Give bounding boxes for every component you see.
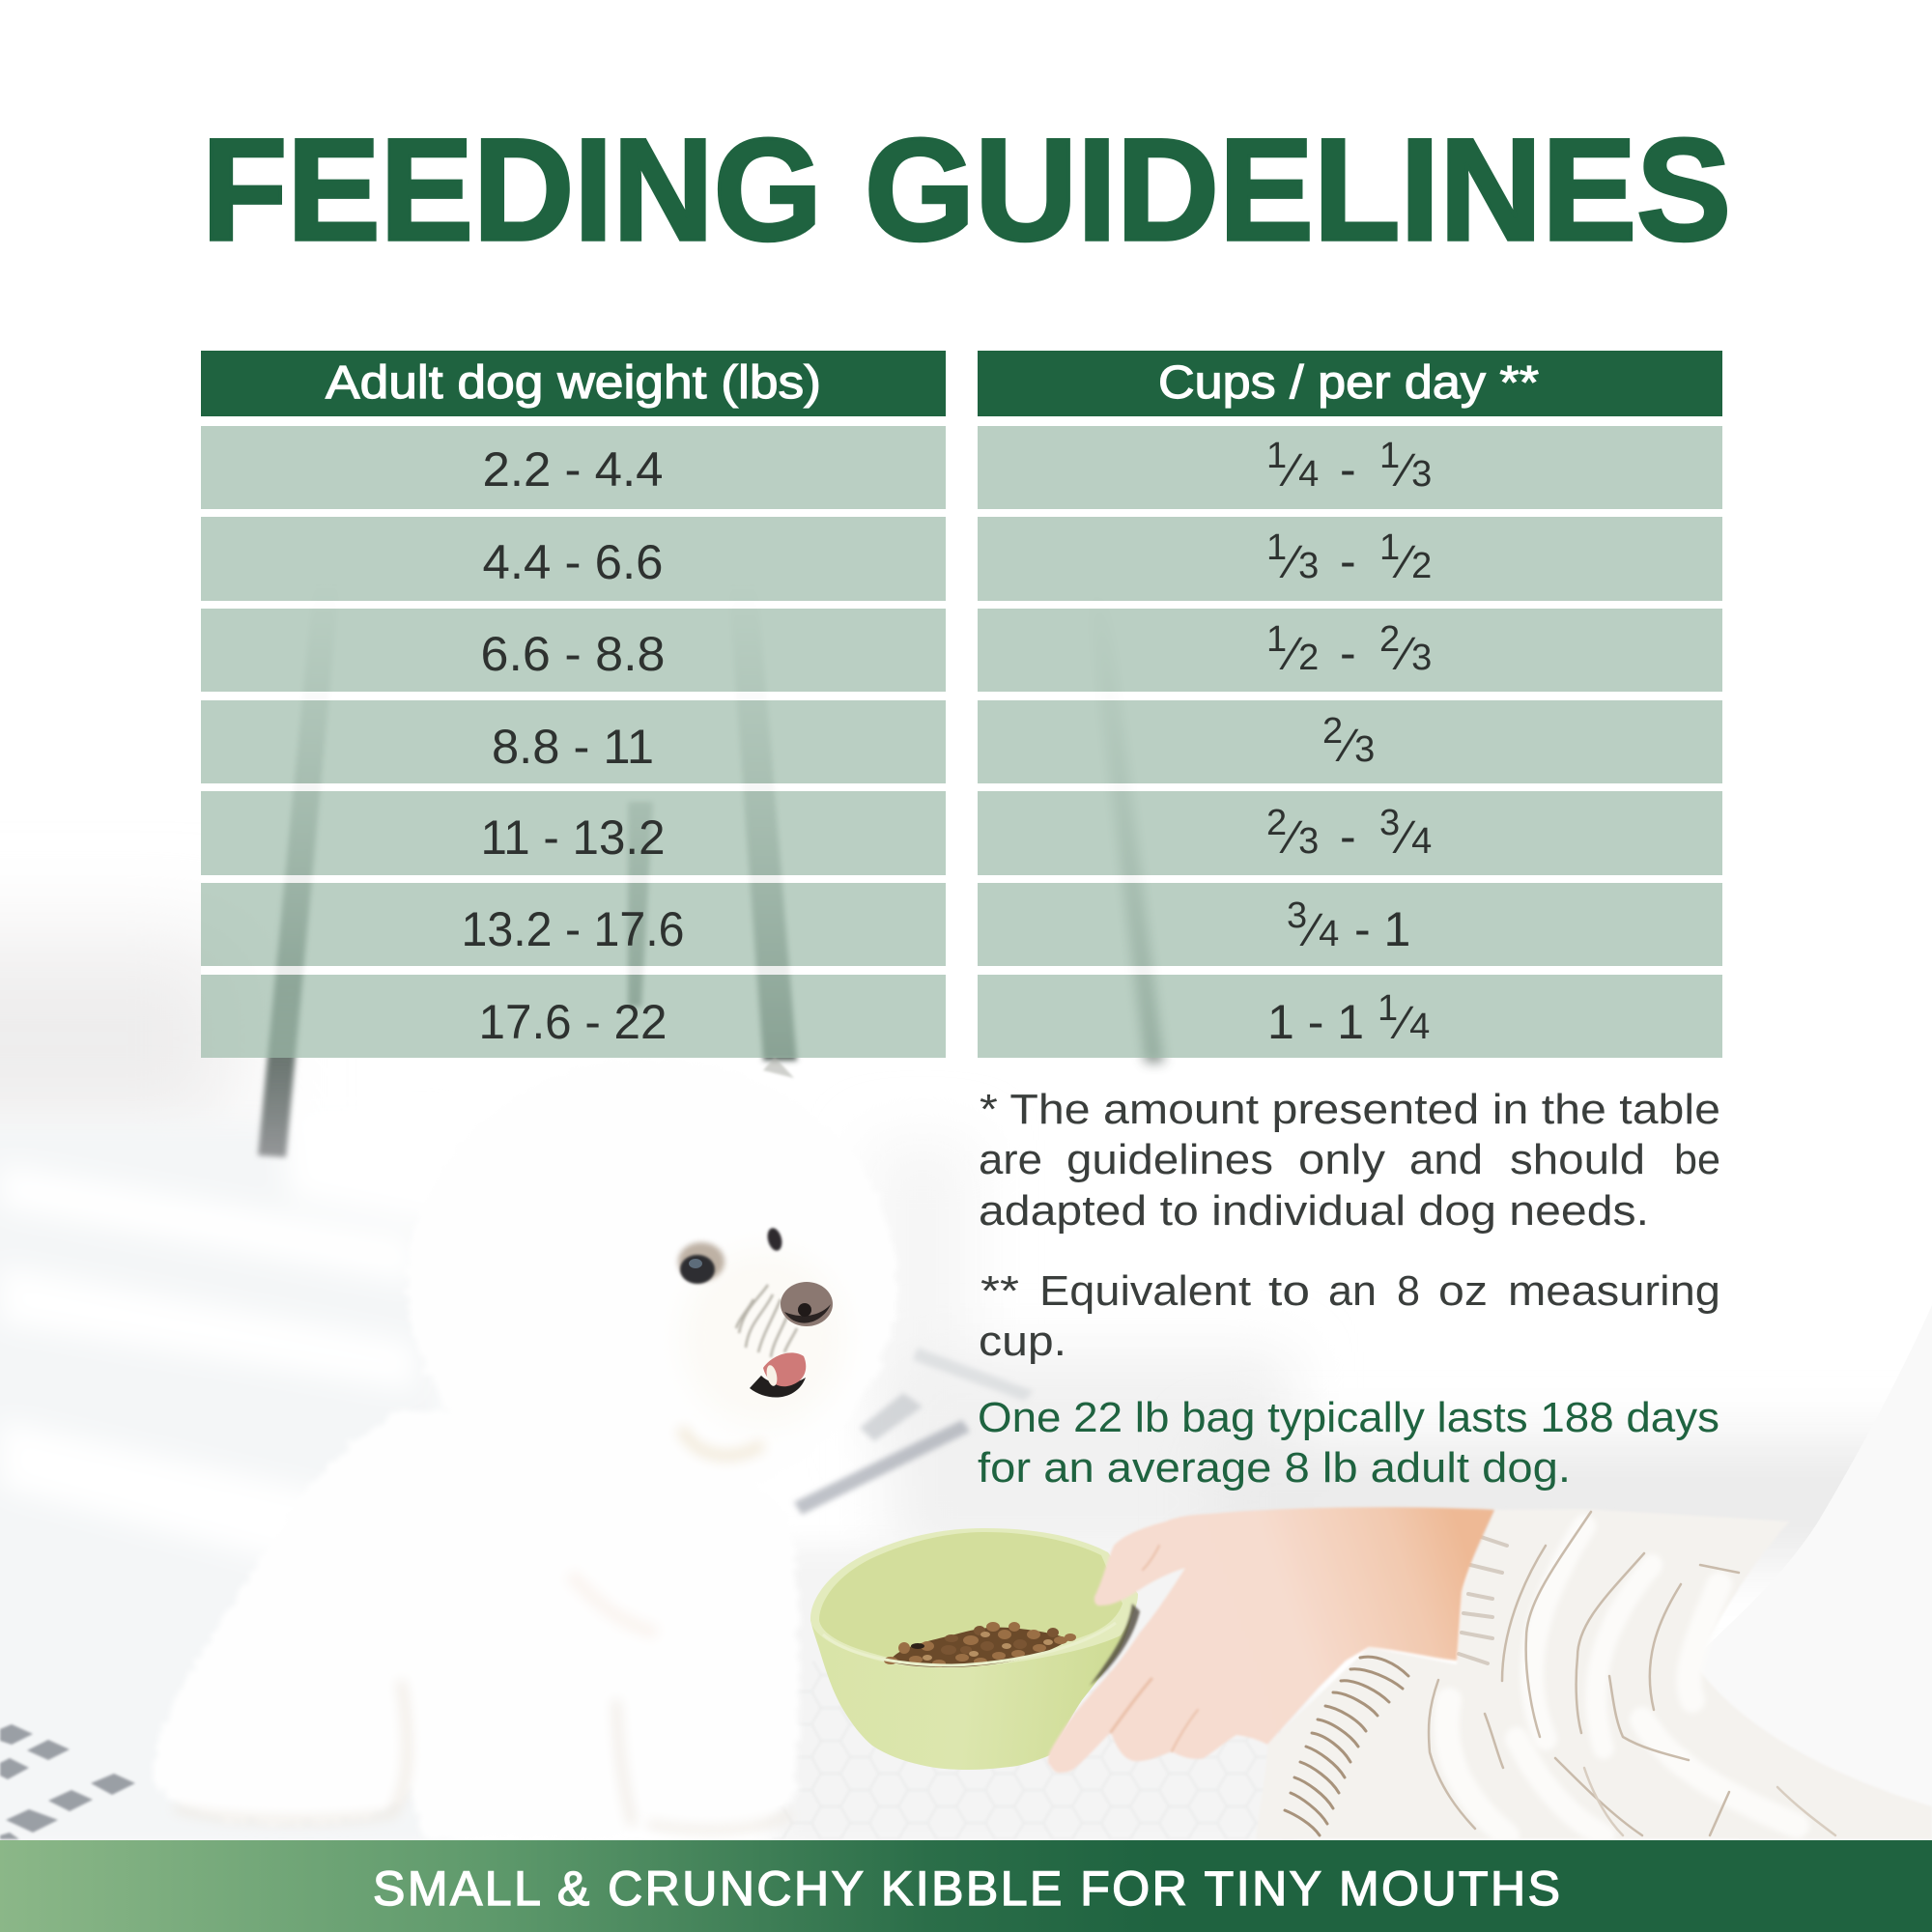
row 4: two thirds: 3: [1354, 729, 1375, 770]
weight values: 11 - 13.2: [481, 810, 665, 865]
row 5: two thirds to three quarters: 3: [1298, 821, 1319, 862]
sleeve body: [1256, 1509, 1932, 1839]
dog mouth: [750, 1352, 806, 1398]
cups rows: [978, 426, 1722, 1058]
header: adult dog weight: [201, 351, 946, 416]
sleeve pleat lines: [1429, 1512, 1835, 1835]
weight values: 17.6 - 22: [479, 995, 667, 1049]
footnote: measuring cup: Equivalent: [1039, 1267, 1251, 1315]
callout: bag duration: [978, 1394, 1719, 1492]
footnote: measuring cup: to: [1268, 1267, 1310, 1315]
cups values: [1266, 436, 1432, 1049]
dog nose: [781, 1282, 833, 1326]
row 1: one quarter to one third: ⁄: [1279, 445, 1303, 497]
cuff ruffle: [1459, 1536, 1507, 1663]
callout: bag duration: for an average 8 lb adult dog.: [978, 1444, 1571, 1492]
bowl interior: [819, 1532, 1122, 1662]
row 1: one quarter to one third: -: [1340, 442, 1356, 497]
row 5: two thirds to three quarters: 2: [1266, 803, 1287, 843]
dog: bichon frise: [151, 1057, 896, 1839]
bowl rim: [810, 1528, 1138, 1668]
footnote: measuring cup: **: [980, 1267, 1019, 1315]
dog ear tuft: [763, 1057, 794, 1078]
row 3: one half to two thirds: 3: [1411, 638, 1432, 678]
row 2: one third to one half: ⁄: [1279, 537, 1303, 588]
chair legs behind the table: [258, 541, 1164, 1157]
title: [202, 108, 1731, 270]
sleeve fold highlights: [1447, 1526, 1797, 1835]
row 5: two thirds to three quarters: ⁄: [1392, 812, 1416, 864]
footnote: guideline amounts: should: [1510, 1136, 1645, 1183]
bowl front lip highlight: [823, 1623, 1116, 1665]
footnote: measuring cup: an: [1328, 1267, 1377, 1315]
bowl outer body: [810, 1536, 1138, 1770]
row 5: two thirds to three quarters: 4: [1411, 821, 1432, 862]
table: cups per day: [978, 351, 1722, 1058]
row 7: one to one and a quarter: ⁄: [1390, 998, 1414, 1049]
row 2: one third to one half: -: [1340, 534, 1356, 588]
floor tiles lower left: [0, 1724, 135, 1839]
row 1: one quarter to one third: 1: [1379, 436, 1400, 476]
row 2: one third to one half: 2: [1411, 546, 1432, 586]
row 3: one half to two thirds: ⁄: [1392, 629, 1416, 680]
row 4: two thirds: 2: [1322, 711, 1343, 752]
footnote: guideline amounts: adapted to individual dog needs.: [979, 1187, 1649, 1235]
bottom banner: [0, 1840, 1932, 1932]
row 3: one half to two thirds: -: [1340, 626, 1356, 680]
footnote: guideline amounts: are: [979, 1136, 1042, 1183]
header: cups per day: Cups / per day **: [1158, 357, 1539, 409]
footnote: measuring cup: [979, 1267, 1720, 1365]
dog body and legs: [151, 1409, 800, 1839]
row 5: two thirds to three quarters: -: [1340, 810, 1356, 864]
row 7: one to one and a quarter: 4: [1409, 1007, 1430, 1047]
footnote: guideline amounts: be: [1674, 1136, 1720, 1183]
torso: [1692, 1305, 1932, 1839]
weight values: 2.2 - 4.4: [483, 442, 663, 497]
food bowl: [810, 1528, 1140, 1770]
footnote: measuring cup: oz: [1438, 1267, 1488, 1315]
footnote: guideline amounts: * The amount presented in the table: [980, 1086, 1720, 1133]
footnote: guideline amounts: only: [1298, 1136, 1385, 1183]
row 1: one quarter to one third: 1: [1266, 436, 1287, 476]
callout: bag duration: One 22 lb bag typically lasts 188 days: [978, 1394, 1719, 1441]
row 1: one quarter to one third: 4: [1298, 454, 1319, 495]
row 6: three quarters to one: 3: [1287, 895, 1307, 936]
header: cups per day: [978, 351, 1722, 416]
dog right eye: [765, 1227, 784, 1252]
row 3: one half to two thirds: ⁄: [1279, 629, 1303, 680]
weight values: 8.8 - 11: [492, 720, 654, 774]
title: GUIDELINES: [865, 108, 1731, 270]
row 2: one third to one half: 1: [1266, 527, 1287, 568]
weight values: 13.2 - 17.6: [462, 902, 684, 956]
floor light stripes: [0, 1082, 618, 1584]
footnote: measuring cup: 8: [1397, 1267, 1420, 1315]
dog left eye: [678, 1242, 724, 1284]
row 7: one to one and a quarter: 1: [1378, 988, 1398, 1029]
row 5: two thirds to three quarters: ⁄: [1279, 812, 1303, 864]
footnote: measuring cup: measuring: [1508, 1267, 1720, 1315]
footnote: guideline amounts: and: [1409, 1136, 1483, 1183]
row 4: two thirds: ⁄: [1335, 721, 1359, 772]
sleeve and torso: [1256, 1305, 1932, 1839]
row 1: one quarter to one third: ⁄: [1392, 445, 1416, 497]
footnotes: [978, 1086, 1720, 1492]
row 5: two thirds to three quarters: 3: [1379, 803, 1400, 843]
bottom banner: SMALL & CRUNCHY KIBBLE FOR TINY MOUTHS: [373, 1861, 1560, 1916]
kibble: [884, 1622, 1076, 1667]
row 3: one half to two thirds: 1: [1266, 619, 1287, 660]
weight values: [462, 442, 684, 1049]
row 6: three quarters to one: ⁄: [1299, 905, 1323, 956]
weight rows: [201, 426, 946, 1058]
footnote: guideline amounts: [979, 1086, 1720, 1235]
row 3: one half to two thirds: 2: [1298, 638, 1319, 678]
footnote: guideline amounts: guidelines: [1066, 1136, 1273, 1183]
weight values: 4.4 - 6.6: [483, 535, 663, 589]
row 1: one quarter to one third: 3: [1411, 454, 1432, 495]
header: adult dog weight: Adult dog weight (lbs): [326, 357, 821, 409]
dog head fluff: [408, 1057, 896, 1509]
lower cuff stripes: [1285, 1657, 1408, 1835]
row 2: one third to one half: ⁄: [1392, 537, 1416, 588]
dog muzzle fur strands: [736, 1285, 797, 1357]
weight values: 6.6 - 8.8: [481, 627, 665, 681]
title: FEEDING: [202, 108, 822, 270]
footnote: measuring cup: cup.: [979, 1318, 1066, 1365]
row 2: one third to one half: 1: [1379, 527, 1400, 568]
row 6: three quarters to one: 4: [1319, 914, 1339, 954]
table: adult dog weight: [201, 351, 946, 1058]
row 7: one to one and a quarter: 1 - 1: [1267, 995, 1364, 1049]
row 6: three quarters to one: - 1: [1354, 902, 1410, 956]
row 2: one third to one half: 3: [1298, 546, 1319, 586]
dog leg shadows: [174, 1575, 792, 1831]
hand holding the bowl: [1048, 1507, 1494, 1773]
dog muzzle shading: [681, 1249, 845, 1427]
row 3: one half to two thirds: 2: [1379, 619, 1400, 660]
bowl shadow beside the hand: [1090, 1604, 1140, 1686]
floor shadow bars right of the dog: [794, 1348, 1034, 1515]
